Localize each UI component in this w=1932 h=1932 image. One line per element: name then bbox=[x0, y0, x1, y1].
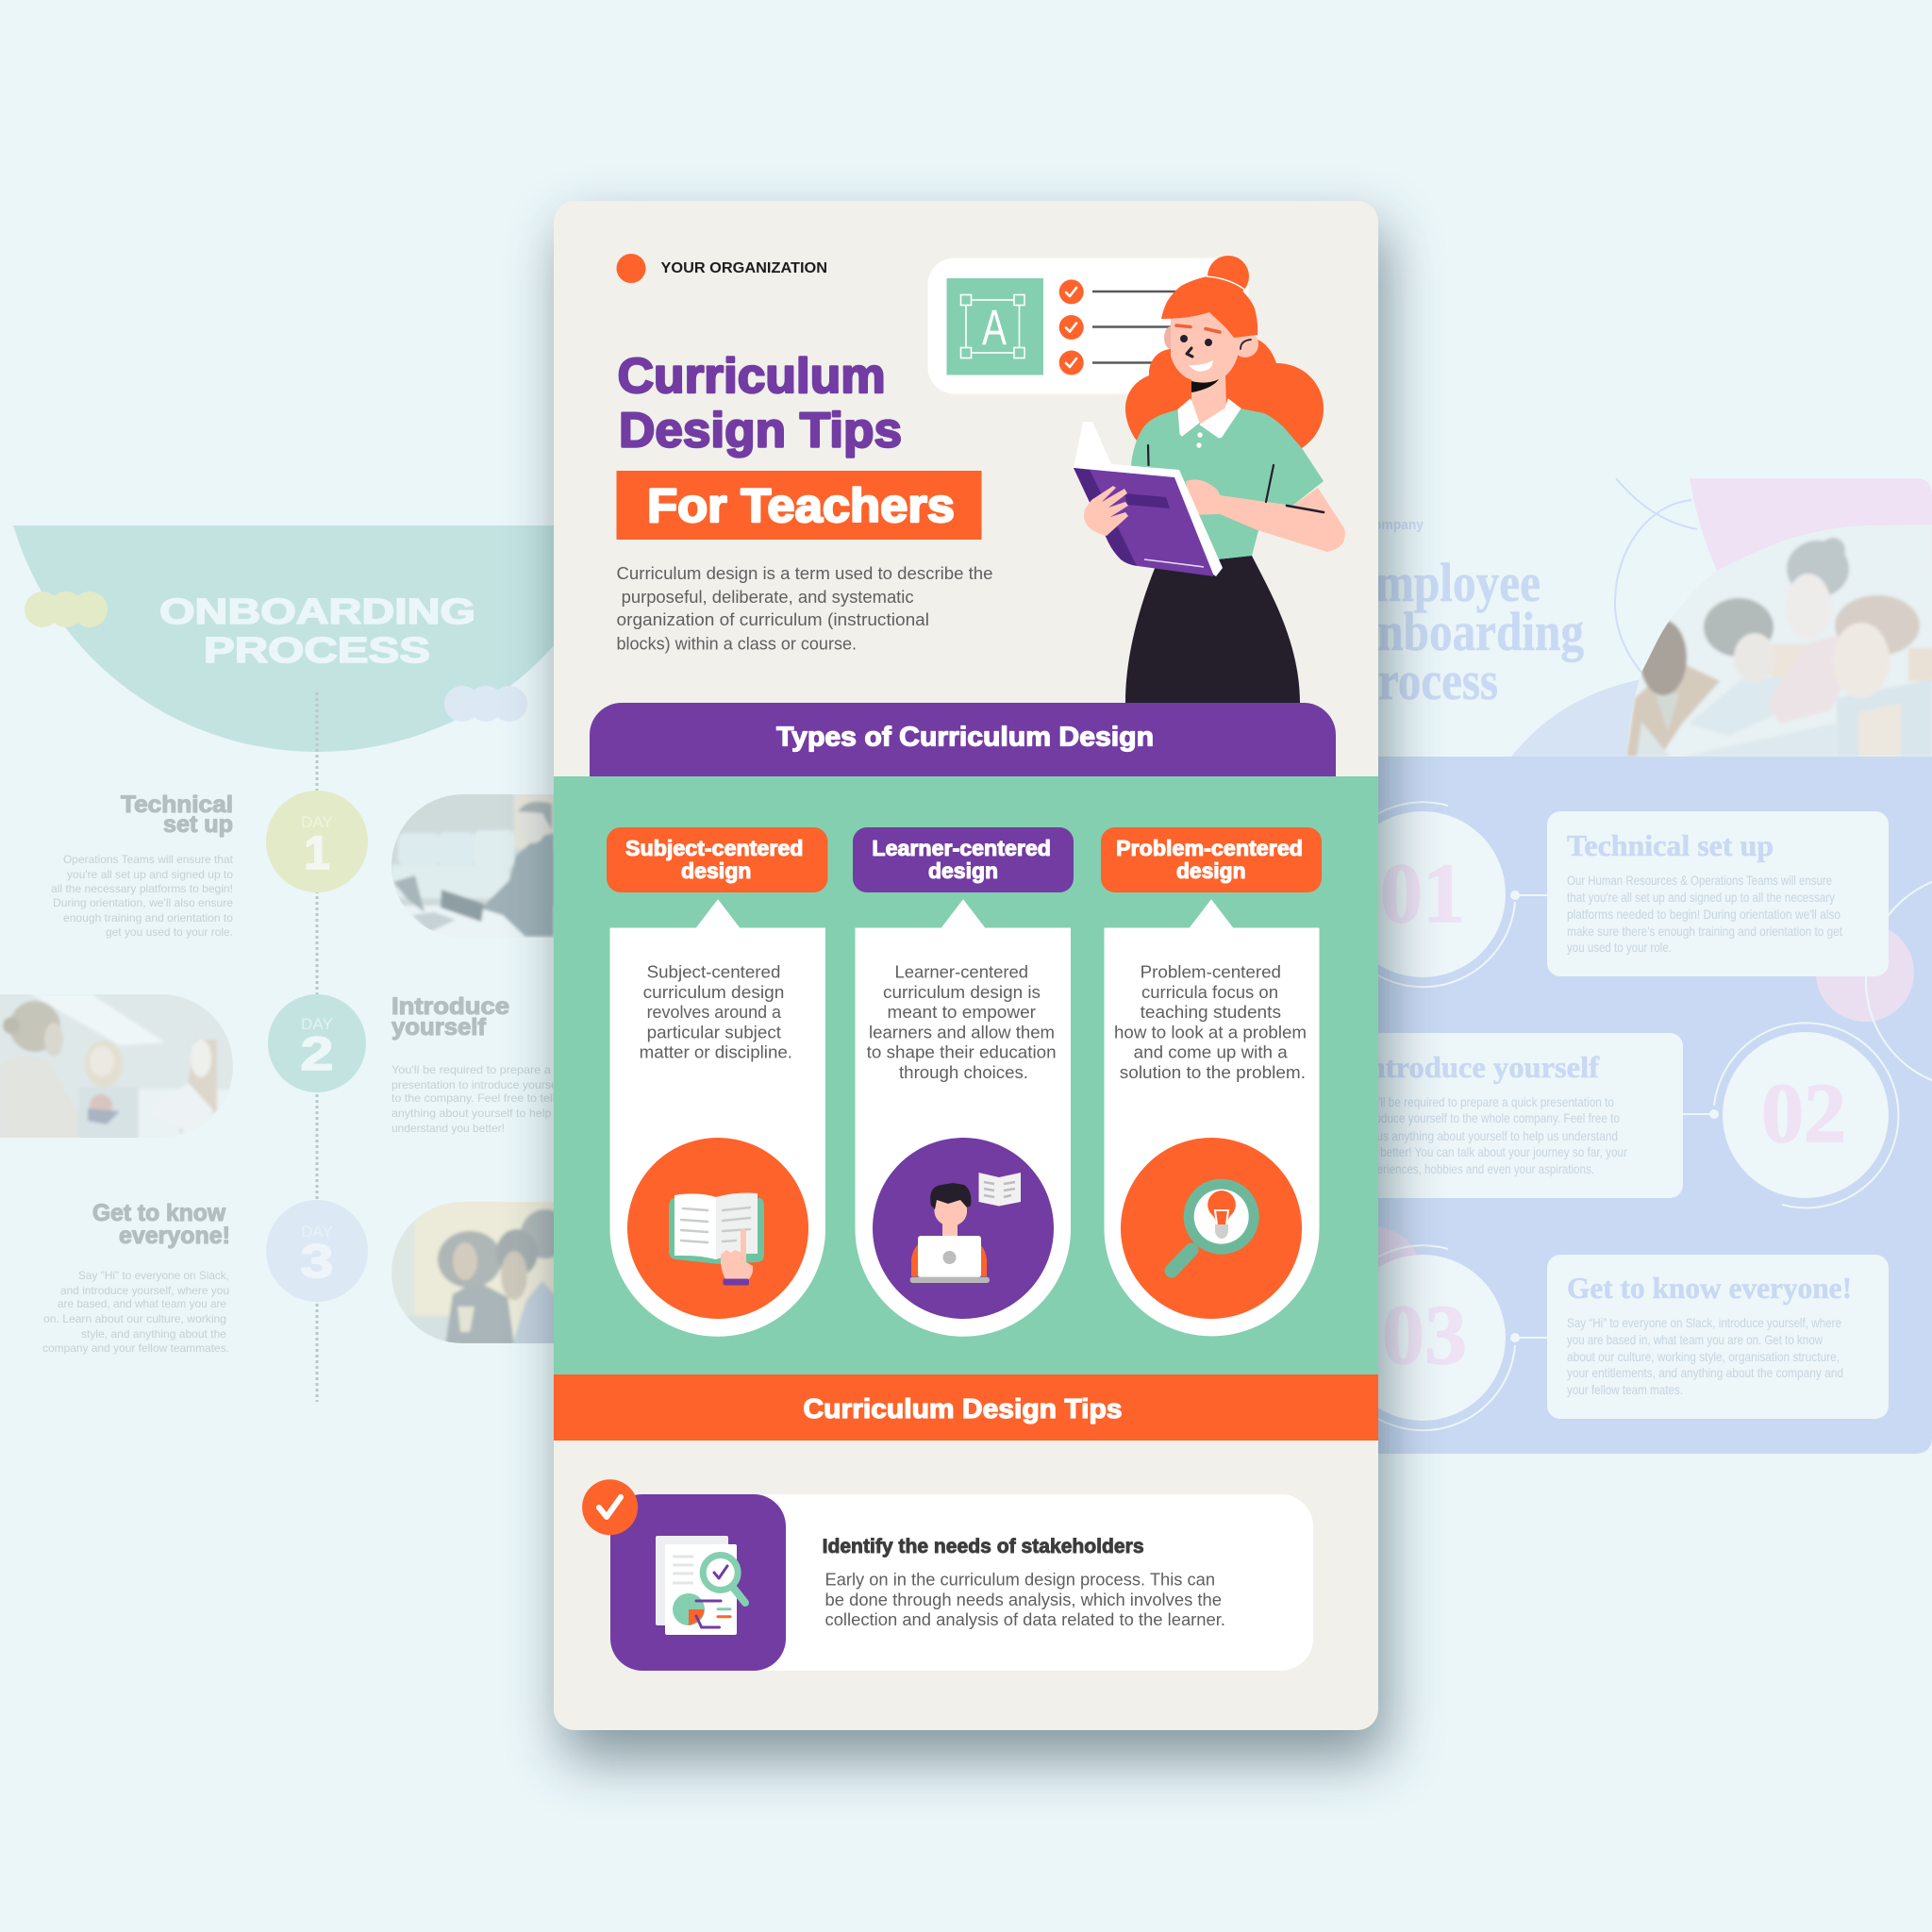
hair front bbox=[1161, 276, 1257, 338]
banner: for teachers: For Teachers bbox=[647, 479, 955, 532]
dotted timeline bbox=[315, 692, 319, 1402]
step 02: 02 bbox=[1761, 1067, 1846, 1160]
body text: to shape their education bbox=[867, 1043, 1057, 1062]
check items bbox=[1059, 279, 1189, 375]
step 02: experiences, hobbies and even your aspirations. bbox=[1359, 1161, 1594, 1176]
body text bbox=[1114, 963, 1307, 1082]
shirt bbox=[1131, 408, 1324, 566]
panel: faded employee onboarding process bbox=[1321, 478, 1932, 1454]
introduce yourself text: anything about yourself to help us bbox=[391, 1107, 567, 1120]
day 2 badge bbox=[268, 994, 366, 1092]
technical set up text: During orientation, we'll also ensure bbox=[53, 896, 233, 909]
top label and headline: Company bbox=[1364, 517, 1424, 533]
shirt buttons bbox=[1196, 432, 1203, 448]
step 01: Technical set up bbox=[1567, 828, 1774, 862]
day 1 badge: 1 bbox=[304, 826, 330, 879]
hand on book bbox=[1084, 486, 1128, 536]
tip body: Early on in the curriculum design process. This can bbox=[824, 1571, 1215, 1590]
icon: check badge bbox=[582, 1479, 638, 1535]
introduce yourself text bbox=[391, 993, 583, 1135]
hair band bbox=[1207, 276, 1247, 291]
column: subject-centered bbox=[607, 827, 827, 1336]
get to know everyone text: and introduce yourself, where you bbox=[60, 1284, 229, 1297]
body text bbox=[640, 963, 792, 1062]
icon: open book with hand bbox=[627, 1138, 808, 1319]
face bbox=[1171, 307, 1241, 382]
introduce yourself text: You'll be required to prepare a quick bbox=[391, 1063, 583, 1076]
teal header semicircle bbox=[13, 525, 554, 752]
step 02 bbox=[1340, 1023, 1898, 1208]
step 01 bbox=[1340, 802, 1889, 987]
photo: team greeting bbox=[0, 991, 241, 1141]
body text: meant to empower bbox=[887, 1003, 1036, 1022]
get to know everyone text: Get to know bbox=[92, 1200, 226, 1226]
book page flap bbox=[1074, 422, 1111, 468]
get to know everyone text: Say "Hi" to everyone on Slack, bbox=[78, 1269, 229, 1282]
body text: teaching students bbox=[1141, 1003, 1281, 1022]
body text: Learner-centered bbox=[894, 963, 1028, 982]
step 01: platforms needed to begin! During orientation we'll also bbox=[1567, 907, 1840, 922]
day 3 badge: 3 bbox=[300, 1235, 334, 1288]
step 02: Introduce yourself bbox=[1357, 1050, 1599, 1084]
pink corner shape bbox=[1690, 478, 1932, 571]
top label and headline bbox=[1341, 517, 1584, 711]
label: Subject-centered bbox=[625, 836, 804, 860]
top label and headline: Onboarding bbox=[1341, 601, 1584, 662]
label: Learner-centered bbox=[872, 836, 1051, 860]
onboarding heading: ONBOARDING bbox=[159, 592, 475, 632]
book cover bbox=[1074, 468, 1214, 576]
right ring bbox=[1866, 874, 1932, 1089]
body text: revolves around a bbox=[647, 1003, 782, 1022]
section header: types of curriculum design: Types of Curriculum Design bbox=[776, 723, 1154, 753]
day 1 badge bbox=[266, 791, 368, 892]
near arm bbox=[1186, 479, 1345, 552]
step 01: Our Human Resources & Operations Teams will ensure bbox=[1567, 873, 1832, 888]
green blob bbox=[25, 591, 108, 627]
card background bbox=[554, 201, 1378, 1730]
eyes and nose bbox=[1180, 335, 1212, 346]
day 3 badge bbox=[266, 1200, 368, 1302]
onboarding heading: PROCESS bbox=[204, 631, 430, 671]
tip card bbox=[582, 1479, 1313, 1671]
heading: curriculum design tips: Curriculum bbox=[618, 349, 886, 404]
body text: curriculum design is bbox=[883, 983, 1041, 1002]
step 01: make sure there's enough training and orientation to get bbox=[1567, 924, 1842, 939]
label bbox=[1101, 827, 1322, 892]
photo: man with tablet bbox=[391, 794, 554, 938]
introduce yourself text: yourself bbox=[391, 1014, 487, 1041]
day 2 badge: 2 bbox=[300, 1027, 334, 1080]
chin shadow bbox=[1191, 379, 1219, 392]
introduce yourself text: to the company. Feel free to tell us bbox=[391, 1091, 571, 1105]
introduce yourself text: Introduce bbox=[391, 993, 509, 1020]
illustration: checklist panel bbox=[928, 258, 1249, 394]
get to know everyone text: company and your fellow teammates. bbox=[42, 1341, 229, 1355]
intro paragraph: organization of curriculum (instructional bbox=[617, 610, 929, 629]
tip body: be done through needs analysis, which involves the bbox=[824, 1591, 1222, 1609]
eyebrows bbox=[1176, 325, 1220, 332]
intro paragraph: blocks) within a class or course. bbox=[617, 634, 857, 653]
book label bbox=[1124, 493, 1170, 508]
white card bbox=[1105, 900, 1319, 1336]
step 03: your entitlements, and anything about the company and bbox=[1567, 1365, 1843, 1380]
technical set up text: enough training and orientation to bbox=[63, 911, 233, 924]
organization logo: YOUR ORGANIZATION bbox=[660, 260, 827, 276]
blue blob bbox=[444, 686, 527, 722]
technical set up text: set up bbox=[163, 811, 233, 838]
shirt creases bbox=[1148, 445, 1324, 512]
step 03: your fellow team mates. bbox=[1567, 1382, 1683, 1397]
body text: curricula focus on bbox=[1141, 983, 1278, 1002]
top label and headline: Employee bbox=[1344, 552, 1541, 613]
icon: document review bbox=[656, 1536, 745, 1635]
icon: learner at laptop bbox=[873, 1138, 1054, 1319]
white card bbox=[610, 900, 824, 1336]
tip body bbox=[824, 1571, 1225, 1629]
illustration: teacher reading book bbox=[1074, 256, 1345, 703]
column: problem-centered bbox=[1101, 827, 1322, 1336]
step 03: Say “Hi” to everyone on Slack, introduce yourself, where bbox=[1567, 1315, 1841, 1330]
tip body: collection and analysis of data related to the learner. bbox=[824, 1610, 1225, 1629]
letter A: A bbox=[982, 300, 1007, 356]
label bbox=[607, 827, 827, 892]
photo: team around a laptop bbox=[1623, 519, 1932, 759]
section header: types of curriculum design bbox=[590, 703, 1336, 776]
label: Problem-centered bbox=[1116, 836, 1303, 860]
day 2 badge: DAY bbox=[301, 1015, 333, 1033]
heading: curriculum design tips: Design Tips bbox=[619, 404, 902, 458]
label bbox=[853, 827, 1074, 892]
day 1 badge: DAY bbox=[301, 813, 333, 831]
get to know everyone text bbox=[42, 1200, 230, 1355]
collar bbox=[1178, 399, 1241, 438]
label: design bbox=[928, 858, 998, 883]
body text: particular subject bbox=[647, 1024, 781, 1042]
white card background bbox=[610, 1494, 1313, 1671]
section header: curriculum design tips bbox=[554, 1374, 1378, 1441]
label: design bbox=[681, 858, 751, 883]
frame around letter A bbox=[960, 294, 1024, 358]
step 02: introduce yourself to the whole company. Feel free to bbox=[1359, 1110, 1620, 1125]
body text: curriculum design bbox=[643, 983, 784, 1002]
body text: solution to the problem. bbox=[1120, 1063, 1306, 1082]
technical set up text: get you used to your role. bbox=[106, 925, 233, 939]
technical set up text: you're all set up and signed up to bbox=[67, 868, 233, 881]
get to know everyone text: are based, and what team you are bbox=[58, 1297, 226, 1310]
blush side bbox=[1164, 326, 1177, 349]
step 03: Get to know everyone! bbox=[1567, 1271, 1852, 1305]
step 03 bbox=[1340, 1245, 1889, 1430]
step 02: tell us anything about yourself to help us understand bbox=[1359, 1128, 1618, 1143]
icon: magnifier with light bulb bbox=[1121, 1138, 1302, 1319]
step 02: you better! You can talk about your journey so far, your bbox=[1359, 1144, 1627, 1159]
day 3 badge: DAY bbox=[301, 1223, 333, 1241]
body text bbox=[867, 963, 1057, 1082]
technical set up text: all the necessary platforms to begin! bbox=[51, 882, 233, 895]
organization logo bbox=[617, 254, 827, 283]
thin circle outlines bbox=[1615, 478, 1697, 675]
get to know everyone text: everyone! bbox=[119, 1223, 230, 1249]
body text: learners and allow them bbox=[869, 1024, 1055, 1042]
book white pages bbox=[1074, 464, 1223, 576]
step 01: 01 bbox=[1380, 847, 1465, 941]
banner: for teachers bbox=[617, 471, 981, 540]
step 01: that you're all set up and signed up to all the necessary bbox=[1567, 890, 1835, 905]
panel: faded onboarding process timeline bbox=[0, 525, 554, 1402]
technical set up text: Operations Teams will ensure that bbox=[63, 853, 234, 866]
technical set up text: Technical bbox=[121, 791, 233, 818]
top label and headline: Process bbox=[1350, 650, 1498, 711]
pink circle right bbox=[1816, 924, 1914, 1022]
body text: through choices. bbox=[899, 1063, 1028, 1082]
skirt bbox=[1125, 556, 1300, 703]
hair back bbox=[1125, 321, 1324, 448]
purple icon tile bbox=[610, 1494, 786, 1671]
body text: how to look at a problem bbox=[1114, 1024, 1307, 1042]
neck bbox=[1191, 374, 1226, 425]
blue semicircle bbox=[1511, 675, 1670, 757]
get to know everyone text: style, and anything about the bbox=[81, 1327, 226, 1341]
step 03: about our culture, working style, organisation structure, bbox=[1567, 1349, 1840, 1364]
intro paragraph: purposeful, deliberate, and systematic bbox=[622, 588, 914, 607]
book spine bbox=[1074, 468, 1137, 566]
intro paragraph bbox=[617, 564, 992, 653]
photo: colleagues laughing bbox=[391, 1202, 554, 1343]
step 03: 03 bbox=[1382, 1289, 1467, 1382]
body text: Problem-centered bbox=[1141, 963, 1281, 982]
intro paragraph: Curriculum design is a term used to describe the bbox=[617, 564, 992, 583]
section header: curriculum design tips: Curriculum Design Tips bbox=[804, 1394, 1123, 1424]
green panel bbox=[554, 776, 1378, 1374]
heading: curriculum design tips bbox=[618, 349, 902, 458]
body text: and come up with a bbox=[1134, 1043, 1289, 1062]
white card bbox=[856, 900, 1070, 1336]
introduce yourself text: understand you better! bbox=[391, 1122, 505, 1135]
step 01: you used to your role. bbox=[1567, 940, 1672, 955]
blue steps background bbox=[1321, 757, 1932, 1454]
step 02: You'll be required to prepare a quick presentation to bbox=[1359, 1094, 1614, 1109]
body text: matter or discipline. bbox=[640, 1043, 792, 1062]
ear bbox=[1232, 331, 1258, 358]
column: learner-centered bbox=[853, 827, 1074, 1336]
introduce yourself text: presentation to introduce yourself bbox=[391, 1078, 564, 1091]
technical set up text bbox=[51, 791, 234, 939]
card shadow bbox=[562, 226, 1387, 1759]
step 03: you are based in, what team you are on. Get to know bbox=[1567, 1332, 1824, 1347]
onboarding heading bbox=[159, 592, 475, 671]
label: design bbox=[1176, 858, 1245, 883]
pink circle left bbox=[1324, 1226, 1422, 1324]
body text: Subject-centered bbox=[647, 963, 780, 982]
tip heading: Identify the needs of stakeholders bbox=[823, 1536, 1144, 1557]
main infographic card bbox=[554, 201, 1378, 1730]
bun bbox=[1208, 256, 1249, 297]
smile bbox=[1189, 360, 1213, 372]
get to know everyone text: on. Learn about our culture, working bbox=[43, 1312, 226, 1325]
